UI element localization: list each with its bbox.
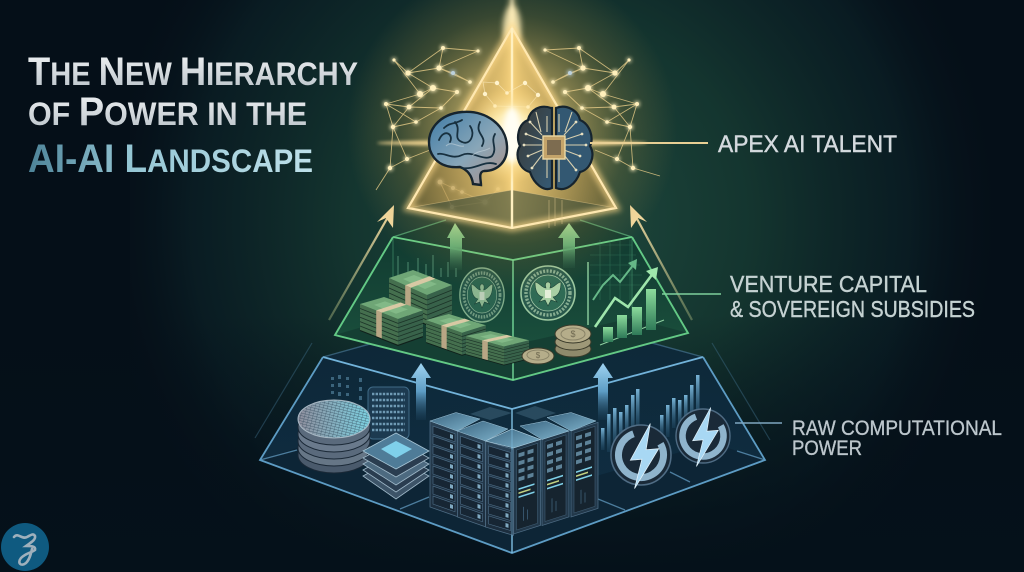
icon: circuit brain: [518, 107, 592, 189]
arrow: long left gold up: [329, 205, 394, 320]
title: [28, 50, 358, 181]
label: apex ai talent: APEX AI TALENT: [718, 131, 897, 158]
title: OF POWER IN THE: [28, 90, 307, 134]
wall chart details left: [398, 255, 456, 277]
wall chart details left: [331, 375, 409, 439]
label: venture capital and sovereign subsidies: [662, 271, 975, 322]
icon: power bolt small: [675, 408, 731, 466]
arrow: blue left up: [411, 363, 431, 420]
neural network left: [376, 46, 500, 209]
bar chart: power demand: [601, 375, 700, 452]
icon: silicon wafer stack: [298, 400, 370, 473]
label: venture capital and sovereign subsidies: & SOVEREIGN SUBSIDIES: [730, 296, 975, 322]
icon: human brain: [429, 112, 507, 185]
arrow: blue right up: [593, 363, 613, 420]
neural network right: [543, 46, 660, 176]
label: raw computational power: RAW COMPUTATIONAL: [792, 417, 1002, 440]
label: raw computational power: POWER: [792, 437, 862, 460]
green pyramid tier frame: [335, 220, 688, 380]
icon: processor chip stack: [363, 433, 429, 499]
title: THE NEW HIERARCHY: [28, 50, 358, 94]
icon: government seal left: [460, 268, 504, 322]
center light burst: [464, 87, 560, 183]
tier: raw computational power: [255, 335, 770, 553]
icon: government seal right: [521, 266, 575, 320]
golden glow: [347, 0, 677, 295]
label: venture capital and sovereign subsidies: VENTURE CAPITAL: [730, 271, 927, 297]
icon: coins: $: [570, 329, 576, 339]
arrow: green left up: [447, 223, 465, 270]
tier: apex ai talent: [347, 0, 677, 295]
icon: coins: $: [536, 351, 541, 360]
tier: venture capital and sovereign subsidies: [335, 220, 688, 380]
icon: coins: [522, 325, 591, 364]
logo badge: [1, 523, 49, 571]
icon: cash stacks: [360, 270, 529, 365]
icon: server racks: [430, 406, 598, 553]
label: raw computational power: [735, 417, 1002, 460]
title: AI-AI LANDSCAPE: [28, 137, 313, 181]
icon: power bolt large: [610, 424, 672, 489]
blue pyramid tier frame: [255, 335, 770, 553]
arrow: green right up: [558, 223, 580, 268]
arrow: long right gold up: [630, 205, 692, 320]
chart: rising capital growth: [588, 240, 664, 345]
golden pyramid: [408, 28, 616, 228]
